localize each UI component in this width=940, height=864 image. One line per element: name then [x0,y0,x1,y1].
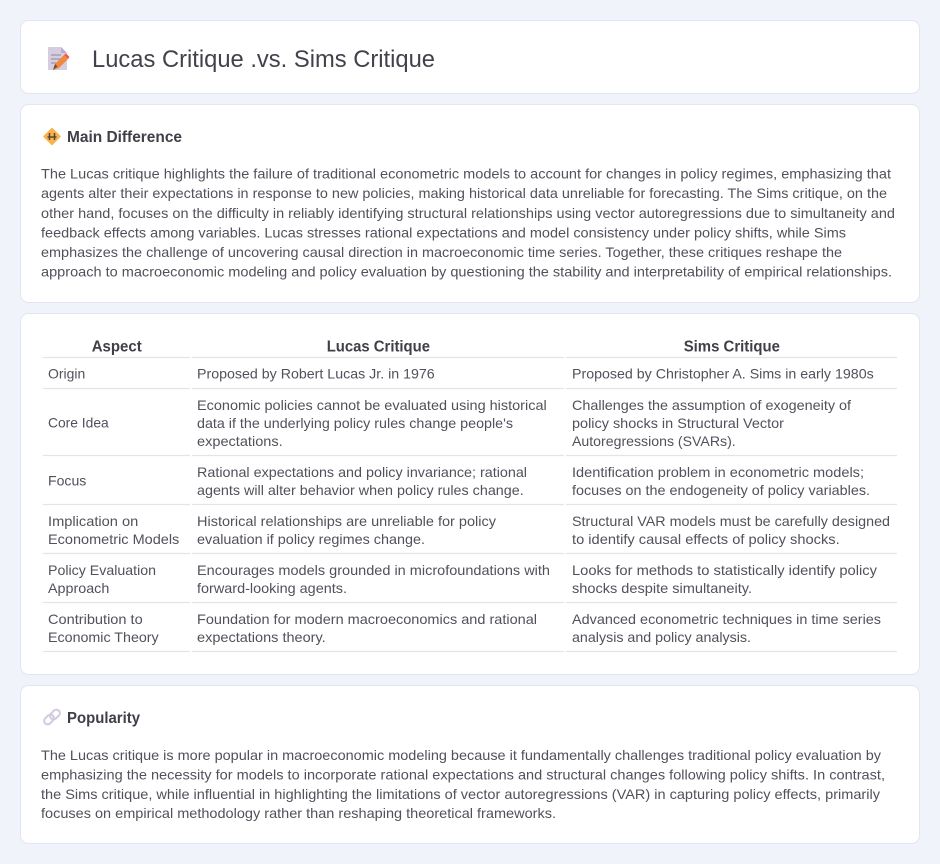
icon: chain link [43,708,61,726]
text block: popularity paragraph [41,747,885,821]
title: Lucas Critique .vs. Sims Critique [92,46,435,73]
panel: popularity [20,686,920,844]
table row: policy evaluation approach: Policy Evaluation [48,562,156,578]
panel: comparison table [20,314,920,674]
panel: header [20,20,920,94]
table header row: Sims Critique [684,338,780,356]
table row: origin: Proposed by Christopher A. Sims in early 1980s [572,366,874,382]
table row: core idea: data if the underlying policy rules change people's [197,415,513,431]
table row: core idea: Economic policies cannot be evaluated using historical [197,397,547,413]
text block: main difference paragraph: approach to macroeconomic modeling and policy evaluation by questioning the stability and interpretability of empirical relationships. [41,264,892,280]
table row: origin [48,366,874,382]
table row: focus: agents will alter behavior when policy rules change. [197,482,524,498]
table row: core idea: Core Idea [48,415,109,431]
table header row [92,338,780,356]
table row: contribution to economic theory: expectations theory. [197,629,326,645]
heading: popularity: Popularity [67,710,140,727]
text block: popularity paragraph: focuses on empirical methodology rather than reshaping theoretical frameworks. [41,805,556,821]
table row: origin: Origin [48,366,85,382]
table row: policy evaluation approach: Looks for methods to statistically identify policy [572,562,877,578]
icon: orange diamond sign [44,128,60,144]
text block: main difference paragraph: agents alter their expectations in response to new policies, making historical data unreliable for forecasting. The Sims critique, on the [41,185,887,201]
text block: main difference paragraph: feedback effects among variables. Lucas stresses rational expectations and model consistency under policy shifts, while Sims [41,224,846,240]
table row: contribution to economic theory: analysis and policy analysis. [572,629,751,645]
table row: implication on econometric models [48,513,890,547]
table row: core idea: Autoregressions (SVARs). [572,433,736,449]
text block: popularity paragraph: emphasizing the necessity for models to incorporate rational expectations and structural changes following policy shifts. In contrast, [41,766,885,782]
table row: core idea: policy shocks in Structural Vector [572,415,784,431]
table row: contribution to economic theory [48,611,881,645]
text block: main difference paragraph [41,166,895,280]
text block: main difference paragraph: The Lucas critique highlights the failure of traditional econometric models to account for changes in policy regimes, emphasizing that [41,166,891,182]
icon: document with pencil [48,47,70,70]
table row: implication on econometric models: Structural VAR models must be carefully designed [572,513,890,529]
heading: main difference: Main Difference [67,129,182,146]
table row: policy evaluation approach: shocks despite simultaneity. [572,580,752,596]
table row: focus [48,464,870,498]
table header row: Aspect [92,338,142,356]
table row: policy evaluation approach: forward-looking agents. [197,580,347,596]
table row: implication on econometric models: Econometric Models [48,531,179,547]
table row: policy evaluation approach [48,562,877,596]
table row: focus: focuses on the endogeneity of policy variables. [572,482,870,498]
table row: focus: Rational expectations and policy invariance; rational [197,464,527,480]
table row: policy evaluation approach: Approach [48,580,109,596]
table row: implication on econometric models: Implication on [48,513,138,529]
table row: implication on econometric models: to identify causal effects of policy shocks. [572,531,840,547]
table row: implication on econometric models: evaluation if policy regimes change. [197,531,425,547]
panel: main difference [20,104,920,302]
text block: popularity paragraph: The Lucas critique is more popular in macroeconomic modeling because it fundamentally challenges traditional policy evaluation by [41,747,881,763]
table row: focus: Identification problem in econometric models; [572,464,864,480]
text block: main difference paragraph: emphasizes the challenge of uncovering causal direction in macroeconomic time series. Together, these critiques reshape the [41,244,842,260]
table row: origin: Proposed by Robert Lucas Jr. in 1976 [197,366,435,382]
table row: core idea [48,397,851,449]
table row: core idea: Challenges the assumption of exogeneity of [572,397,851,413]
table row: contribution to economic theory: Foundation for modern macroeconomics and rational [197,611,537,627]
text block: popularity paragraph: the Sims critique, while influential in highlighting the limitations of vector autoregressions (VAR) in capturing policy effects, primarily [41,786,880,802]
table row: focus: Focus [48,473,86,489]
table header row: Lucas Critique [327,338,430,356]
table row: implication on econometric models: Historical relationships are unreliable for policy [197,513,496,529]
table row: core idea: expectations. [197,433,283,449]
table row: policy evaluation approach: Encourages models grounded in microfoundations with [197,562,550,578]
table row: contribution to economic theory: Contribution to [48,611,143,627]
text block: main difference paragraph: other hand, focuses on the difficulty in reliably identifying structural relationships using vector autoregressions due to simultaneity and [41,205,895,221]
table row: contribution to economic theory: Advanced econometric techniques in time series [572,611,881,627]
table row: contribution to economic theory: Economic Theory [48,629,159,645]
